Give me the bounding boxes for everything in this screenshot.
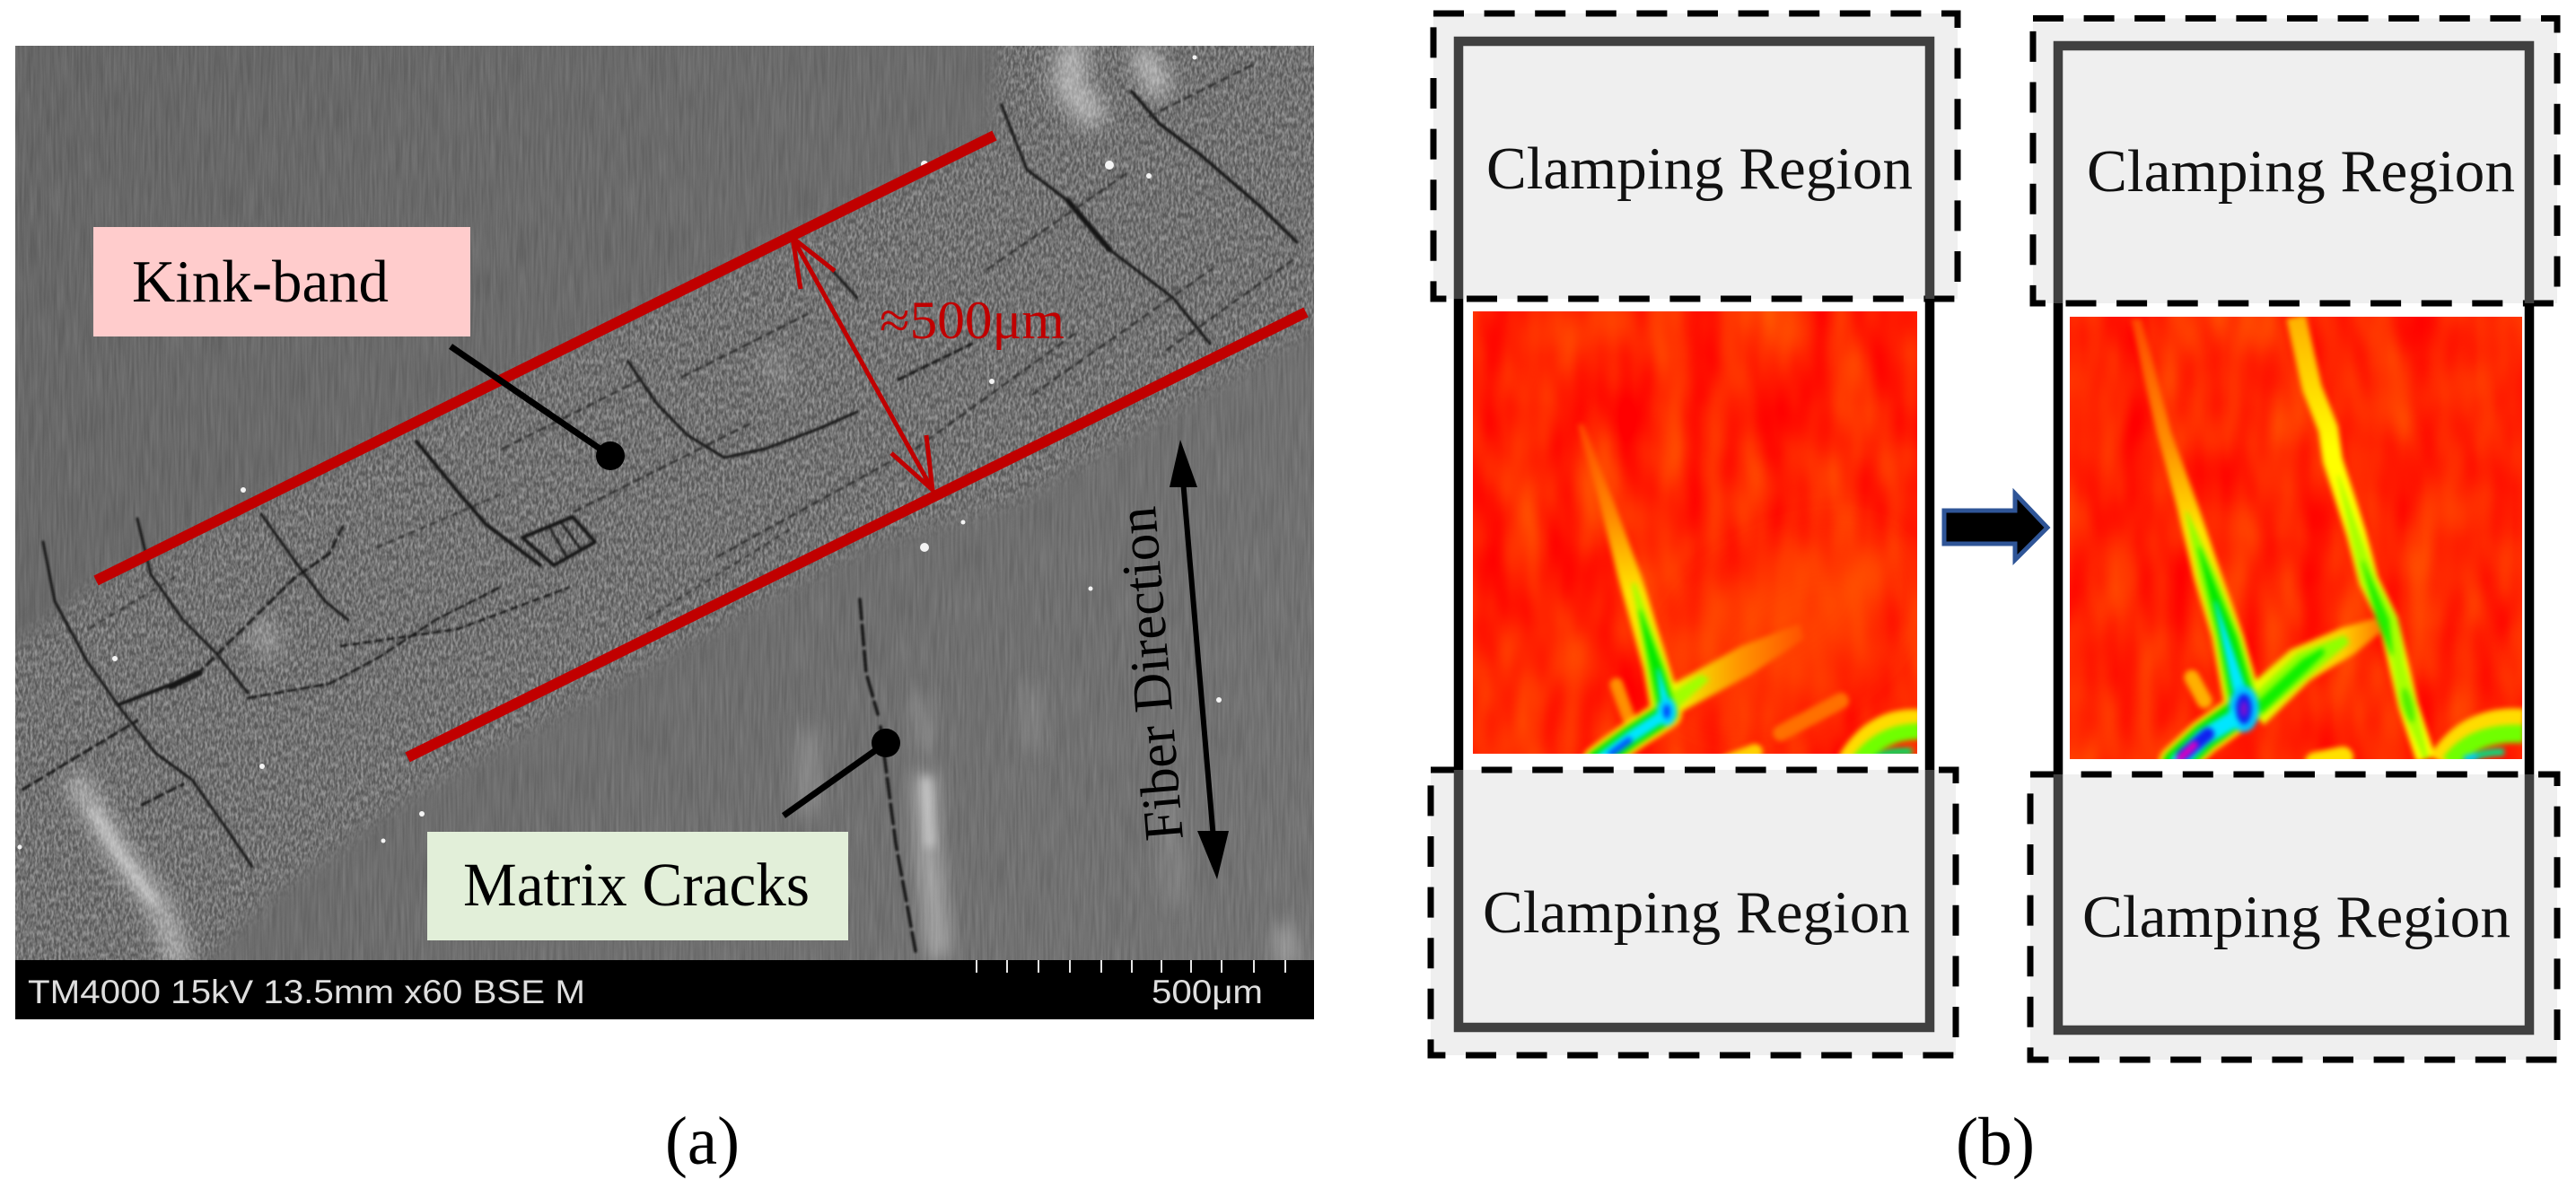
matrix and fiber cracks <box>22 63 1297 951</box>
panel (b): left specimen <box>1431 13 1958 1055</box>
fiber direction label: Fiber Direction <box>1107 504 1196 843</box>
matrix cracks label box <box>427 832 848 940</box>
panel (a) caption: (a) <box>665 1104 740 1179</box>
panel (b) caption: (b) <box>1956 1105 2035 1180</box>
scale length: 500μm <box>1152 974 1263 1010</box>
kink-band label box <box>93 227 470 336</box>
top clamping label: Clamping Region <box>1486 135 1913 202</box>
fiber direction arrow <box>1170 440 1229 879</box>
bottom clamping region dashed <box>2030 774 2557 1060</box>
bottom clamping region dashed <box>1431 770 1956 1055</box>
specimen outline <box>1459 41 1930 1027</box>
scale ticks <box>977 960 1285 973</box>
top clamping label: Clamping Region <box>2087 138 2515 205</box>
instrument caption: TM4000 15kV 13.5mm x60 BSE M <box>28 974 585 1010</box>
top clamping region dashed <box>2033 18 2557 303</box>
kink-band leader <box>451 346 625 470</box>
bottom clamping label: Clamping Region <box>1483 879 1910 946</box>
width double arrow <box>793 238 933 490</box>
matrix cracks label box: Matrix Cracks <box>463 851 810 919</box>
strain map before <box>1473 311 1921 763</box>
kink-band upper boundary <box>96 135 994 581</box>
kink-band lower boundary <box>407 312 1306 757</box>
width label: ≈500μm <box>880 291 1065 350</box>
scale bar strip <box>15 960 1314 1019</box>
panel (b): right specimen <box>2030 18 2557 1060</box>
bottom clamping label: Clamping Region <box>2082 884 2510 950</box>
progression arrow <box>1944 494 2047 560</box>
matrix cracks leader <box>784 729 900 816</box>
kink-band label box: Kink-band <box>132 249 389 315</box>
top clamping region dashed <box>1433 13 1958 299</box>
micrograph background texture <box>15 46 1314 960</box>
strain map after <box>2070 317 2524 763</box>
bright specks <box>18 56 1222 849</box>
panel (a): SEM micrograph <box>15 46 1314 1019</box>
specimen outline <box>2058 46 2529 1030</box>
